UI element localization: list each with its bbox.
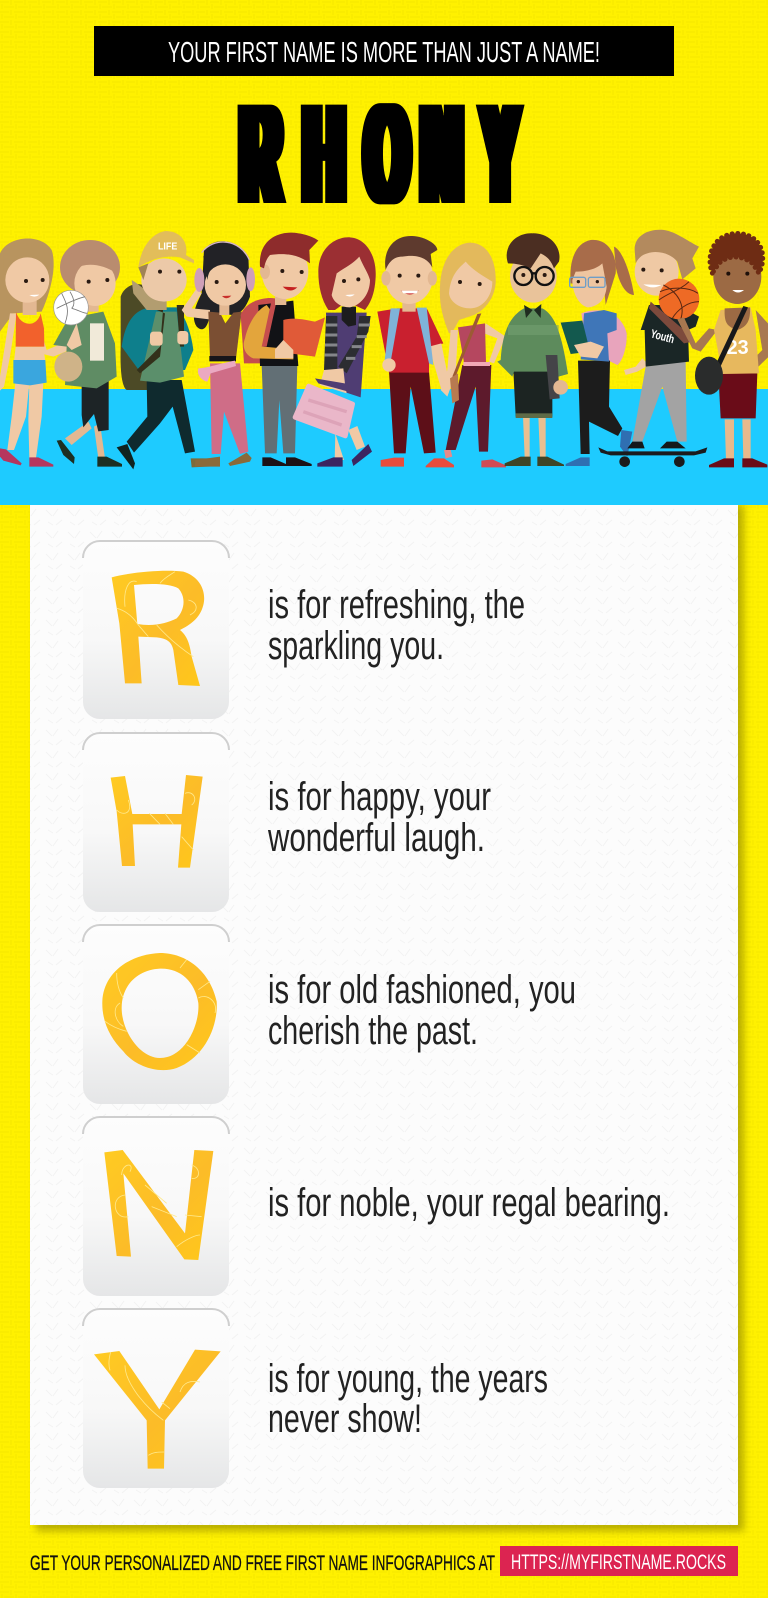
panel: white content panel <box>30 505 744 1531</box>
student 3: hiker with cap and backpack: LIFE <box>158 241 178 252</box>
text: O line: cherish the past. <box>268 1009 478 1053</box>
text: R line <box>268 583 525 668</box>
student 12: boy in yellow tank top: 23 <box>727 336 749 359</box>
icon: decorated letter O <box>102 953 217 1070</box>
left six students <box>0 231 376 469</box>
student 4: girl with headphones <box>182 241 255 467</box>
text: H line <box>267 775 491 860</box>
student 11: skater with basketball <box>624 230 699 448</box>
text: O line: is for old fashioned, you <box>268 968 576 1012</box>
icon: volleyball <box>54 290 88 325</box>
icon: decorated letter H <box>111 775 203 868</box>
icon: basketball <box>659 279 699 319</box>
text: R line: is for refreshing, the <box>268 583 525 627</box>
student 3: hiker with cap and backpack <box>117 231 220 469</box>
student 6: girl with pink bag <box>295 237 376 467</box>
right six students <box>377 230 768 467</box>
card: letter O <box>83 925 229 1104</box>
student 2: girl with volleyball <box>53 240 122 467</box>
footer: website badge <box>500 1546 738 1576</box>
card: letter Y <box>83 1309 229 1488</box>
student 9: boy with glasses <box>497 233 568 466</box>
student 1: girl in orange top <box>0 238 82 467</box>
card: letter H <box>83 733 229 912</box>
footer: call to action text: GET YOUR PERSONALIZED AND FREE FIRST NAME INFOGRAPHICS AT <box>30 1552 495 1575</box>
text: Y line <box>268 1357 548 1441</box>
student 5: boy reading a book <box>241 233 325 466</box>
card: letter R <box>83 541 229 719</box>
icon: decorated letter N <box>104 1150 213 1260</box>
illustration: group of twelve students <box>0 230 768 469</box>
icon: decorated letter R <box>112 571 204 686</box>
text: Y line: is for young, the years <box>268 1357 548 1401</box>
floor: blue band <box>0 389 768 505</box>
skateboard <box>598 447 707 467</box>
student 7: boy in red shirt <box>377 236 454 467</box>
banner: tagline <box>94 26 674 76</box>
student 11: skater with basketball: Youth <box>649 327 676 346</box>
student 10: girl with ponytail <box>561 240 634 466</box>
text: R line: sparkling you. <box>268 624 444 668</box>
text: H line: is for happy, your <box>268 775 491 819</box>
title: name: RHONY <box>241 74 518 233</box>
student 8: blonde girl <box>440 243 506 467</box>
text: Y line: never show! <box>268 1397 422 1441</box>
student 12: boy in yellow tank top <box>677 233 768 467</box>
card: letter N <box>83 1117 229 1296</box>
text: O line <box>268 968 576 1053</box>
text: H line: wonderful laugh. <box>267 816 485 860</box>
icon: decorated letter Y <box>94 1350 221 1469</box>
